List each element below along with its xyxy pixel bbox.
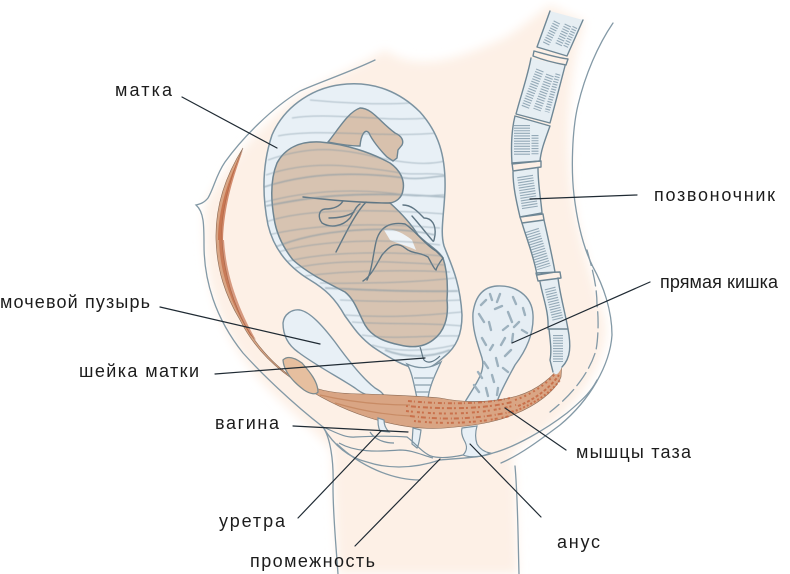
label: pelvic muscles: мышцы таза — [576, 442, 692, 462]
leader: uterus — [182, 97, 277, 148]
leader: pelvic muscles — [505, 408, 566, 450]
bladder — [283, 310, 384, 397]
label: uterus: матка — [115, 80, 173, 100]
label: bladder: мочевой пузырь — [0, 292, 150, 312]
leader: spine — [530, 195, 637, 199]
uterus with amniotic fluid — [264, 84, 462, 369]
leader: cervix — [215, 358, 425, 374]
label: rectum: прямая кишка — [660, 272, 779, 292]
leader: bladder — [160, 307, 320, 344]
uterus outline — [264, 84, 462, 369]
label: spine: позвоночник — [654, 185, 775, 205]
label: perineum: промежность — [250, 551, 375, 571]
leader: rectum — [512, 282, 650, 343]
leader: perineum — [355, 459, 440, 546]
fetus limbs — [303, 197, 443, 281]
amniotic and fetal striations — [264, 100, 462, 356]
cervix and vaginal canal — [407, 347, 441, 398]
pelvic floor muscle — [216, 148, 562, 429]
leader lines — [160, 97, 650, 546]
skin tone wash — [204, 5, 606, 574]
spine — [511, 11, 583, 374]
perineum and lower openings — [323, 418, 490, 458]
label: cervix: шейка матки — [79, 361, 199, 381]
rectum — [465, 286, 533, 402]
leader: vagina — [293, 426, 408, 432]
leader: urethra — [298, 431, 381, 518]
label: vagina: вагина — [215, 413, 280, 433]
fetus foot — [328, 108, 403, 161]
leader: anus — [470, 444, 541, 517]
body contour lines — [196, 23, 613, 574]
label: urethra: уретра — [219, 511, 286, 531]
label: anus: анус — [557, 532, 600, 552]
fetus body — [272, 142, 447, 347]
